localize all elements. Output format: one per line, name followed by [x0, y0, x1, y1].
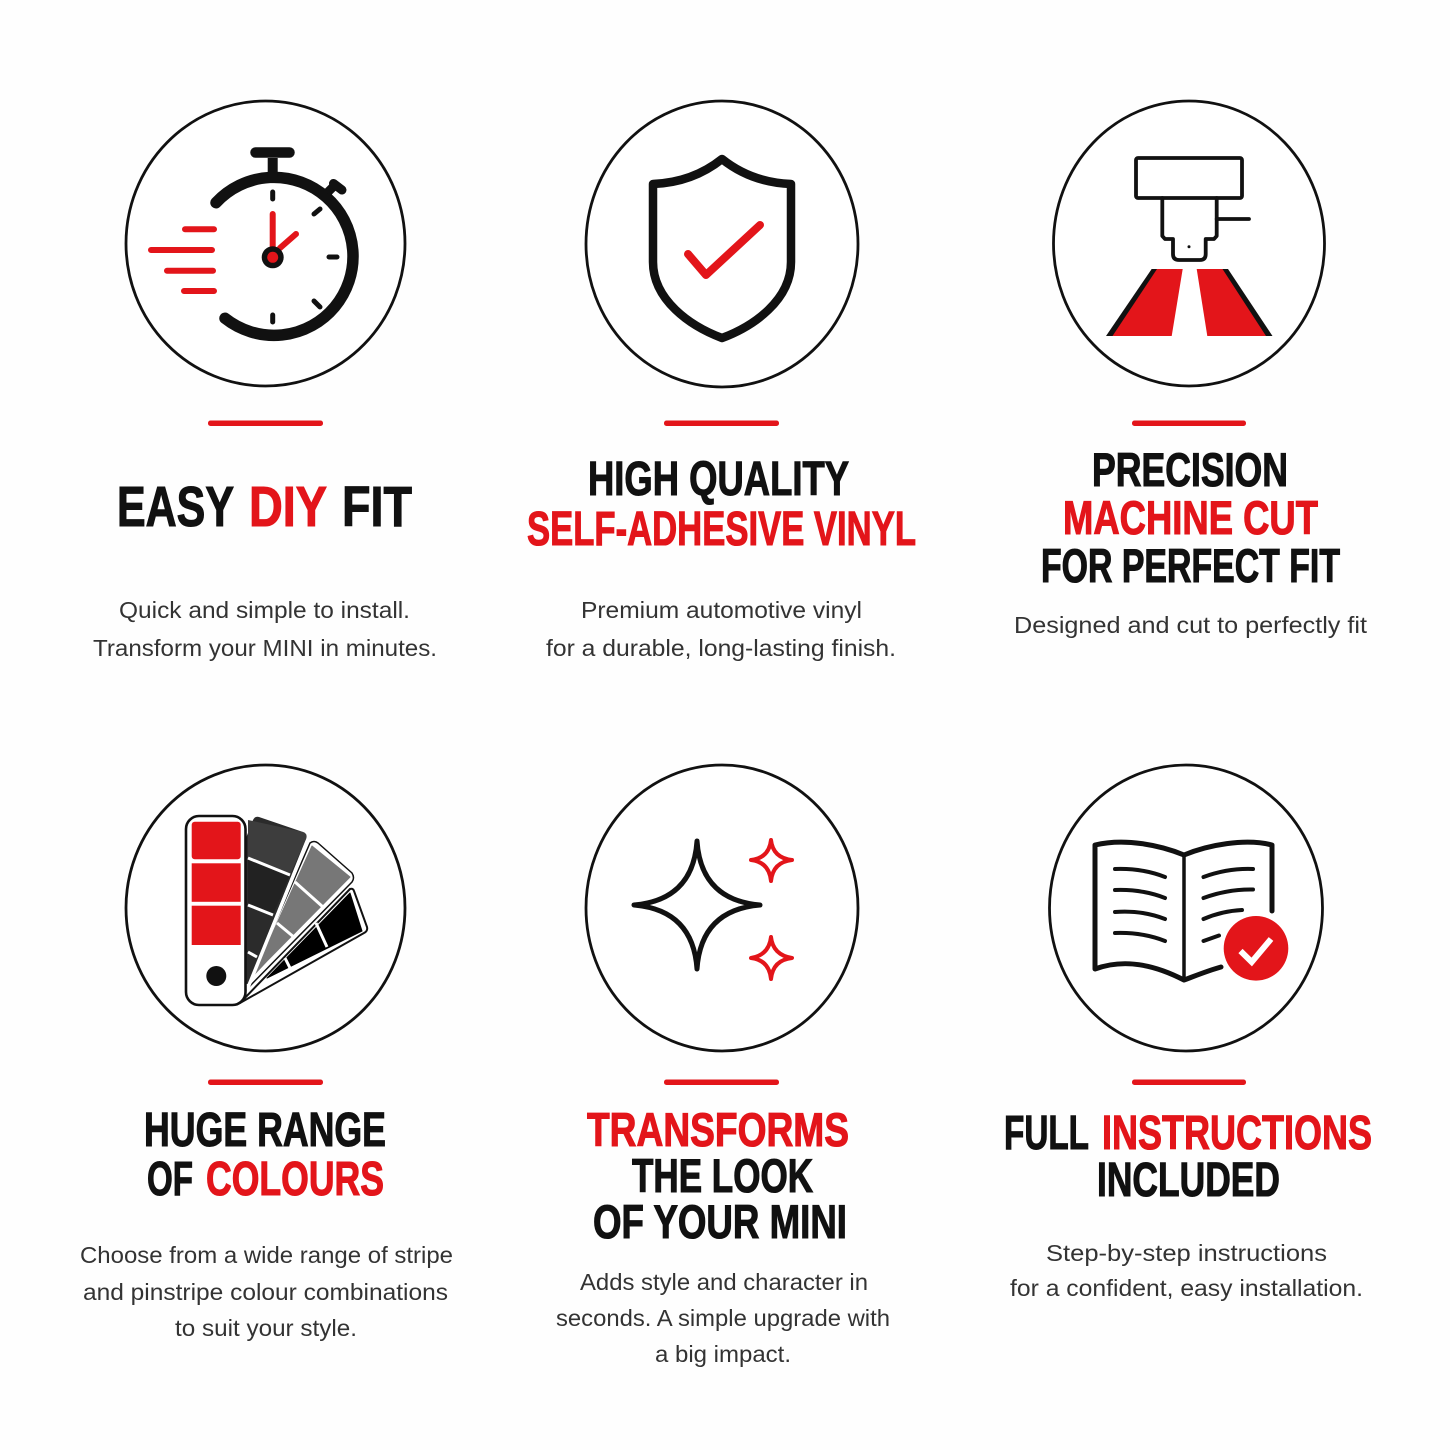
heading: precision machine cut for perfect fit: FOR PERFECT FIT [1041, 539, 1340, 592]
panel: precision machine cut [1014, 101, 1368, 638]
heading: high quality self-adhesive vinyl [527, 453, 916, 556]
heading: high quality self-adhesive vinyl: HIGH QUALITY [588, 453, 849, 506]
icon: cutting machine [1054, 101, 1324, 386]
body text: instructions [1010, 1240, 1363, 1301]
heading: easy DIY fit [117, 475, 412, 539]
body text: easy DIY fit: Transform your MINI in minutes. [93, 635, 437, 661]
panel: high quality self-adhesive vinyl [527, 101, 916, 661]
icon: shield with check [586, 101, 858, 387]
body text: colours [80, 1242, 453, 1341]
heading: huge range of colours [144, 1104, 386, 1206]
icon: sparkles [586, 765, 858, 1051]
panel: huge range of colours [80, 765, 453, 1341]
panel: full instructions included [1004, 765, 1372, 1301]
body text: easy DIY fit: Quick and simple to install. [119, 597, 410, 623]
heading: full instructions included [1004, 1107, 1372, 1207]
body text: colours: Choose from a wide range of stripe [80, 1242, 453, 1268]
body text: easy DIY fit [93, 597, 437, 661]
body text: vinyl: Premium automotive vinyl [581, 597, 862, 623]
body text: transforms: a big impact. [655, 1341, 791, 1367]
icon: colour swatch fan [126, 765, 405, 1051]
panel: transforms the look [556, 765, 890, 1367]
heading: easy DIY fit: EASY [117, 475, 234, 539]
body text: vinyl [546, 597, 896, 661]
heading: transforms the look of your MINI: TRANSFORMS [587, 1103, 849, 1156]
heading: transforms the look of your MINI: OF YOUR MINI [593, 1195, 847, 1248]
body text: colours: and pinstripe colour combinations [83, 1279, 448, 1305]
heading: precision machine cut for perfect fit [1041, 443, 1340, 592]
icon: stopwatch [126, 101, 405, 386]
body text: precision: Designed and cut to perfectly fit [1014, 612, 1368, 638]
body text: vinyl: for a durable, long-lasting finish. [546, 635, 896, 661]
heading: transforms the look of your MINI: THE LOOK [632, 1149, 813, 1202]
icon: open book with check badge [1050, 765, 1322, 1051]
body text: instructions: Step-by-step instructions [1046, 1240, 1327, 1266]
body text: transforms: Adds style and character in [580, 1269, 868, 1295]
heading: transforms the look of your MINI [587, 1103, 849, 1248]
heading: easy DIY fit: DIY [249, 475, 327, 539]
heading: precision machine cut for perfect fit: PRECISION [1092, 443, 1288, 496]
body text: instructions: for a confident, easy installation. [1010, 1275, 1363, 1301]
heading: high quality self-adhesive vinyl: SELF-ADHESIVE VINYL [527, 503, 916, 556]
heading: huge range of colours: HUGE RANGE [144, 1104, 386, 1157]
heading: easy DIY fit: FIT [342, 475, 412, 539]
heading: huge range of colours: OF [147, 1153, 193, 1206]
body text: transforms: seconds. A simple upgrade with [556, 1305, 890, 1331]
heading: precision machine cut for perfect fit: MACHINE CUT [1063, 491, 1318, 544]
heading: full instructions included: FULL [1004, 1107, 1089, 1160]
body text: transforms [556, 1269, 890, 1367]
panel: easy DIY fit [93, 101, 437, 661]
body text: colours: to suit your style. [175, 1315, 357, 1341]
heading: full instructions included: INCLUDED [1097, 1154, 1280, 1207]
heading: huge range of colours: COLOURS [206, 1153, 384, 1206]
